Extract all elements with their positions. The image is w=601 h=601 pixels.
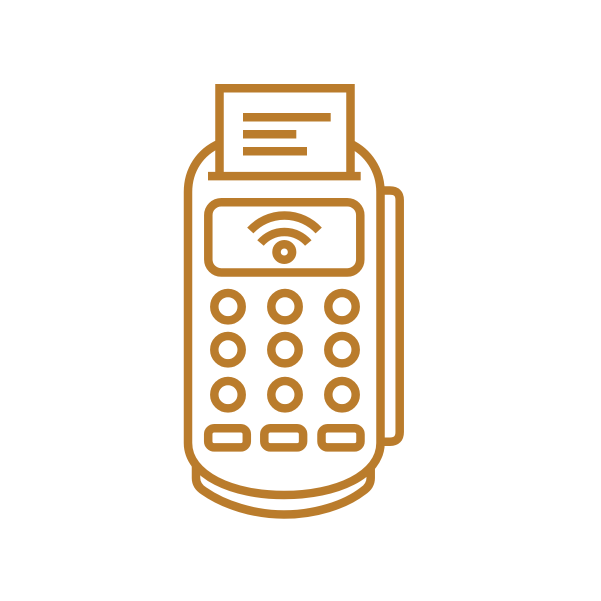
icon: contactless wifi symbol [250, 216, 319, 260]
terminal body [188, 144, 380, 495]
receipt paper [220, 88, 350, 176]
function keys [208, 428, 360, 447]
printed receipt [208, 88, 361, 176]
side card slot [384, 190, 400, 442]
keypad buttons [214, 293, 356, 408]
display screen [208, 202, 360, 272]
terminal base [196, 466, 371, 514]
receipt text lines [243, 117, 331, 151]
receipt slot [208, 172, 361, 180]
